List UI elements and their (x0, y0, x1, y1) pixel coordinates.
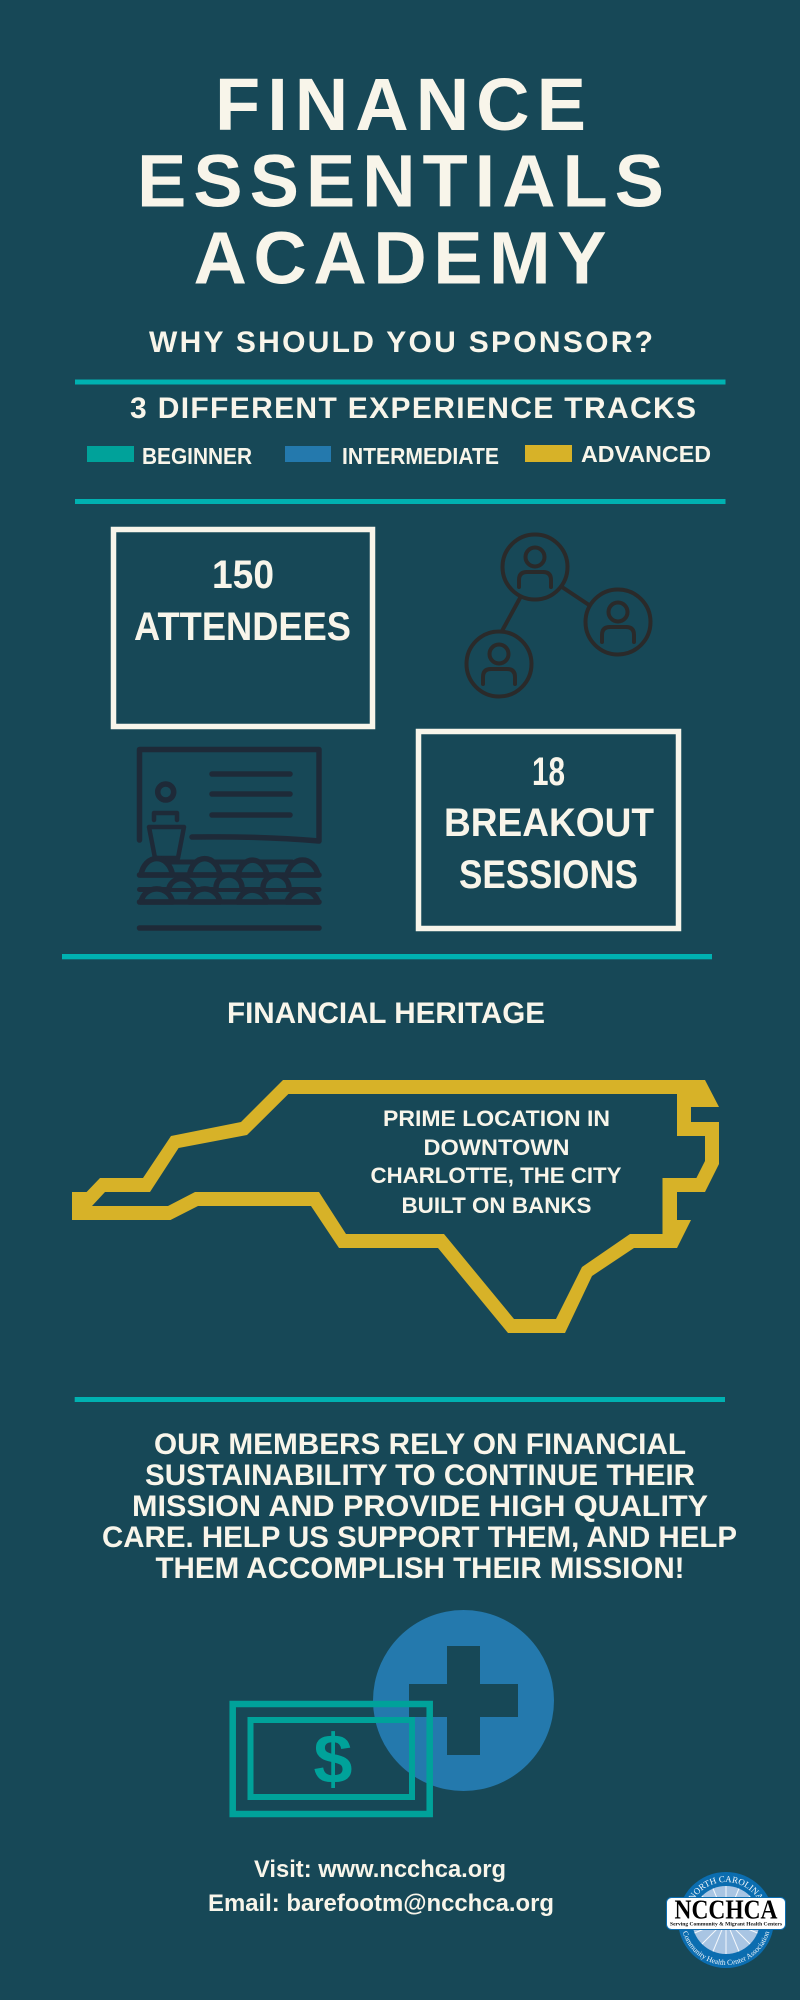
legend item: intermediate (285, 443, 499, 469)
logo: ncchca (666, 1872, 786, 1968)
heading: experience tracks: 3 DIFFERENT EXPERIENCE TRACKS (130, 392, 696, 425)
panel: 150 attendees: ATTENDEES (134, 605, 351, 649)
map: north carolina outline (72, 1080, 719, 1333)
panel: 18 breakout sessions: 18 (532, 750, 565, 794)
text block: member mission (102, 1428, 737, 1585)
icon: presentation to audience (140, 750, 319, 928)
contact details: Email: barefootm@ncchca.org (208, 1890, 554, 1917)
legend item: beginner: BEGINNER (142, 443, 252, 469)
subtitle: why should you sponsor: WHY SHOULD YOU SPONSOR? (149, 326, 653, 359)
legend item: beginner (87, 443, 252, 469)
icon: dollar bill (233, 1704, 430, 1814)
title: ACADEMY (194, 216, 606, 300)
callout: prime location (370, 1106, 622, 1218)
panel: 18 breakout sessions (418, 732, 678, 928)
logo: ncchca: Serving Community & Migrant Health Centers (670, 1922, 782, 1928)
panel: 150 attendees: 150 (212, 553, 274, 597)
logo: ncchca: Community Health Center Association (683, 1931, 770, 1965)
panel: 18 breakout sessions: BREAKOUT (444, 801, 654, 845)
icon: connected people network (466, 534, 650, 696)
text block: member mission: SUSTAINABILITY TO CONTINUE THEIR (145, 1459, 695, 1492)
logo: ncchca: NCCHCA (674, 1894, 778, 1924)
contact details: Visit: www.ncchca.org (254, 1856, 506, 1883)
legend: experience tracks (87, 441, 711, 469)
title (137, 63, 664, 300)
text block: member mission: MISSION AND PROVIDE HIGH QUALITY (132, 1490, 708, 1523)
callout: prime location: BUILT ON BANKS (402, 1193, 592, 1218)
text block: member mission: CARE. HELP US SUPPORT THEM, AND HELP (102, 1521, 737, 1554)
title: ESSENTIALS (137, 140, 664, 222)
panel: 150 attendees (114, 530, 372, 726)
contact details (208, 1856, 554, 1917)
icon: dollar bill: $ (314, 1720, 352, 1798)
panel: 18 breakout sessions: SESSIONS (459, 853, 638, 897)
text block: member mission: THEM ACCOMPLISH THEIR MISSION! (156, 1552, 684, 1585)
heading: financial heritage: FINANCIAL HERITAGE (227, 997, 545, 1030)
legend item: advanced (525, 441, 711, 467)
callout: prime location: PRIME LOCATION IN (383, 1106, 610, 1131)
callout: prime location: CHARLOTTE, THE CITY (370, 1163, 622, 1188)
legend item: advanced: ADVANCED (581, 441, 711, 467)
text block: member mission: OUR MEMBERS RELY ON FINANCIAL (154, 1428, 686, 1461)
title: FINANCE (215, 63, 586, 146)
icon: medical cross circle (373, 1610, 554, 1791)
logo: ncchca: NORTH CAROLINA (688, 1876, 762, 1897)
legend item: intermediate: INTERMEDIATE (342, 443, 499, 469)
callout: prime location: DOWNTOWN (424, 1135, 570, 1160)
